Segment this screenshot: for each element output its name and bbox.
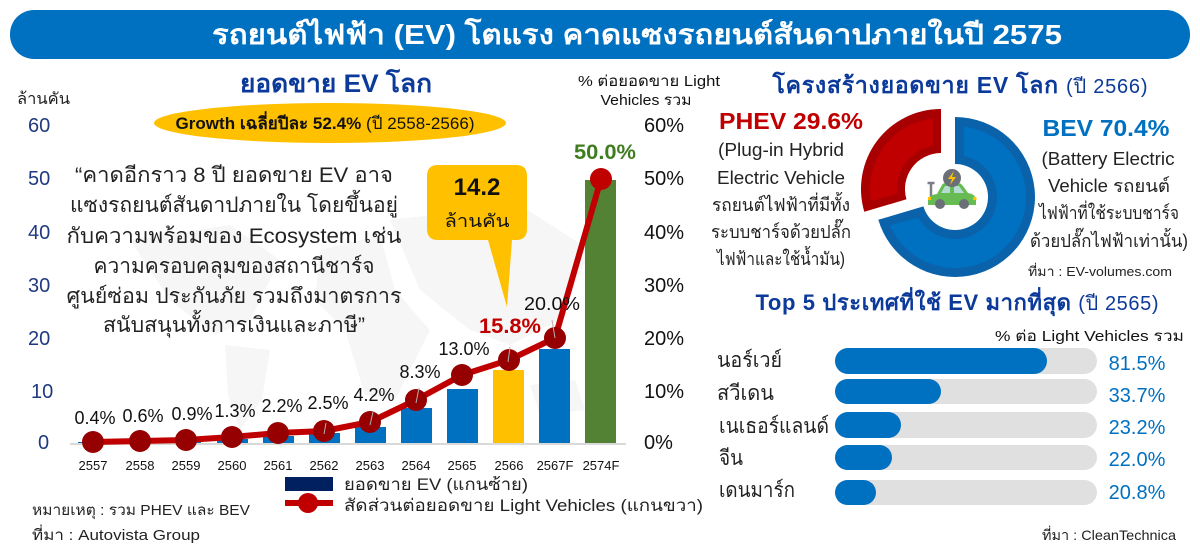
x-axis year labels: 2561 xyxy=(264,458,292,473)
quote text: แซงรถยนต์สันดาปภายใน โดยขึ้นอยู่ xyxy=(70,190,398,218)
data labels: percent: 0.9% xyxy=(171,404,213,424)
row: Denmark: เดนมาร์ก xyxy=(719,478,795,502)
row: China: 22.0% xyxy=(1109,449,1166,471)
data labels: percent: 2.2% xyxy=(261,396,303,416)
top 5 unit: % ต่อ Light Vehicles รวม xyxy=(995,328,1184,345)
data labels: percent: 4.2% xyxy=(353,385,395,405)
right axis labels xyxy=(644,115,684,454)
callout: 14.2 million xyxy=(427,165,527,307)
legend xyxy=(285,475,703,515)
data labels: percent: 0.4% xyxy=(74,408,116,428)
top 5 source: ที่มา : CleanTechnica xyxy=(1042,526,1176,543)
PHEV text block xyxy=(711,108,863,269)
left axis labels: 40 xyxy=(28,222,50,244)
BEV text block: Vehicle รถยนต์ xyxy=(1048,176,1170,196)
row: Netherlands: เนเธอร์แลนด์ xyxy=(719,414,829,438)
x-axis year labels: 2562 xyxy=(310,458,338,473)
row: Norway: นอร์เวย์ xyxy=(717,348,782,372)
data labels: percent: 1.3% xyxy=(214,401,256,421)
quote text: “คาดอีกราว 8 ปี ยอดขาย EV อาจ xyxy=(75,164,393,187)
bar chart: EV sales xyxy=(70,180,626,445)
PHEV text block: (Plug-in Hybrid xyxy=(718,140,844,160)
line chart: share of light vehicles xyxy=(82,168,612,453)
BEV text block: BEV 70.4% xyxy=(1042,115,1170,141)
right axis labels: 50% xyxy=(644,168,684,190)
row: Norway xyxy=(717,348,1166,375)
BEV text block xyxy=(1030,115,1188,251)
right axis labels: 0% xyxy=(644,432,673,454)
right axis labels: 40% xyxy=(644,222,684,244)
BEV text block: (Battery Electric xyxy=(1042,149,1174,169)
x-axis year labels: 2563 xyxy=(356,458,384,473)
donut segment: BEV xyxy=(878,117,1035,277)
donut source: ที่มา : EV-volumes.com xyxy=(1028,263,1172,279)
right axis labels: 30% xyxy=(644,275,684,297)
x-axis year labels: 2565 xyxy=(448,458,476,473)
row: Sweden: สวีเดน xyxy=(717,382,774,405)
row: Netherlands xyxy=(719,412,1166,439)
right axis labels: 60% xyxy=(644,115,684,137)
PHEV text block: PHEV 29.6% xyxy=(719,108,863,134)
donut heading: โครงสร้างยอดขาย EV โลก (ปี 2566) xyxy=(772,71,1148,98)
x-axis year labels: 2558 xyxy=(126,458,154,473)
right axis unit: Vehicles รวม xyxy=(600,92,692,109)
PHEV text block: ไฟฟ้าและใช้น้ำมัน) xyxy=(715,246,845,269)
world map background xyxy=(130,205,590,430)
donut segment: PHEV xyxy=(861,109,941,212)
PHEV text block: Electric Vehicle xyxy=(717,168,845,188)
data labels: percent: 0.6% xyxy=(122,406,164,426)
data labels: percent xyxy=(74,141,636,428)
row: Sweden: 33.7% xyxy=(1109,385,1166,407)
right axis unit xyxy=(578,73,721,109)
data labels: percent: 20.0% xyxy=(524,294,580,314)
BEV text block: ด้วยปลั๊กไฟฟ้าเท่านั้น) xyxy=(1030,227,1188,251)
data labels: percent: 13.0% xyxy=(438,339,490,359)
left axis labels: 60 xyxy=(28,115,50,137)
row: Denmark xyxy=(719,478,1166,505)
quote text: สนับสนุนทั้งการเงินและภาษี” xyxy=(103,310,365,338)
BEV text block: ไฟฟ้าที่ใช้ระบบชาร์จ xyxy=(1037,200,1179,223)
left axis labels xyxy=(28,115,53,454)
row: Netherlands: 23.2% xyxy=(1109,417,1166,439)
row: Sweden xyxy=(717,379,1166,407)
left axis labels: 10 xyxy=(31,381,53,403)
callout: 14.2 million: ล้านคัน xyxy=(444,211,510,231)
left chart heading: ยอดขาย EV โลก xyxy=(240,68,432,98)
x-axis year labels: 2560 xyxy=(218,458,246,473)
right axis labels: 10% xyxy=(644,381,684,403)
PHEV text block: รถยนต์ไฟฟ้าที่มีทั้ง xyxy=(712,192,850,215)
row: Denmark: 20.8% xyxy=(1109,482,1166,504)
quote text: ศูนย์ซ่อม ประกันภัย รวมถึงมาตรการ xyxy=(66,284,402,309)
icon: electric car xyxy=(928,169,976,209)
callout: 14.2 million: 14.2 xyxy=(454,174,500,201)
left axis labels: 30 xyxy=(28,275,50,297)
legend: สัดส่วนต่อยอดขาย Light Vehicles (แกนขวา) xyxy=(344,496,703,515)
data labels: percent: 15.8% xyxy=(479,315,541,338)
right axis unit: % ต่อยอดขาย Light xyxy=(578,73,721,90)
x-axis year labels: 2564 xyxy=(402,458,430,473)
x-axis year labels: 2557 xyxy=(79,458,107,473)
note and source xyxy=(32,502,250,544)
x-axis year labels: 2574F xyxy=(583,458,619,473)
note and source: หมายเหตุ : รวม PHEV และ BEV xyxy=(32,502,250,520)
data labels: percent: 8.3% xyxy=(399,362,441,382)
left axis labels: 20 xyxy=(28,328,50,350)
row: Norway: 81.5% xyxy=(1109,353,1166,375)
data labels: percent: 50.0% xyxy=(574,141,636,164)
quote text: กับความพร้อมของ Ecosystem เช่น xyxy=(66,225,402,248)
title banner xyxy=(10,10,1190,59)
PHEV text block: ระบบชาร์จด้วยปลั๊ก xyxy=(711,218,851,242)
right axis labels: 20% xyxy=(644,328,684,350)
left axis labels: 0 xyxy=(38,432,49,454)
left axis labels: 50 xyxy=(28,168,50,190)
quote text: ความครอบคลุมของสถานีชาร์จ xyxy=(94,254,374,279)
legend: ยอดขาย EV (แกนซ้าย) xyxy=(344,475,528,494)
title banner: รถยนต์ไฟฟ้า (EV) โตแรง คาดแซงรถยนต์สันดาปภายในปี 2575 xyxy=(212,17,1062,50)
x-axis year labels: 2566 xyxy=(495,458,523,473)
note and source: ที่มา : Autovista Group xyxy=(32,524,200,544)
x-axis year labels xyxy=(79,458,619,473)
data labels: percent: 2.5% xyxy=(307,393,349,413)
row: China: จีน xyxy=(719,447,743,470)
growth pill: Growth เฉลี่ยปีละ 52.4% (ปี 2558-2566) xyxy=(176,111,474,133)
x-axis year labels: 2567F xyxy=(537,458,573,473)
row: China xyxy=(719,445,1166,471)
x-axis year labels: 2559 xyxy=(172,458,200,473)
growth pill xyxy=(154,103,506,143)
top 5 heading: Top 5 ประเทศที่ใช้ EV มากที่สุด (ปี 2565) xyxy=(756,286,1158,317)
donut chart xyxy=(861,109,1035,277)
left axis unit: ล้านคัน xyxy=(17,90,70,108)
quote text xyxy=(66,164,402,338)
